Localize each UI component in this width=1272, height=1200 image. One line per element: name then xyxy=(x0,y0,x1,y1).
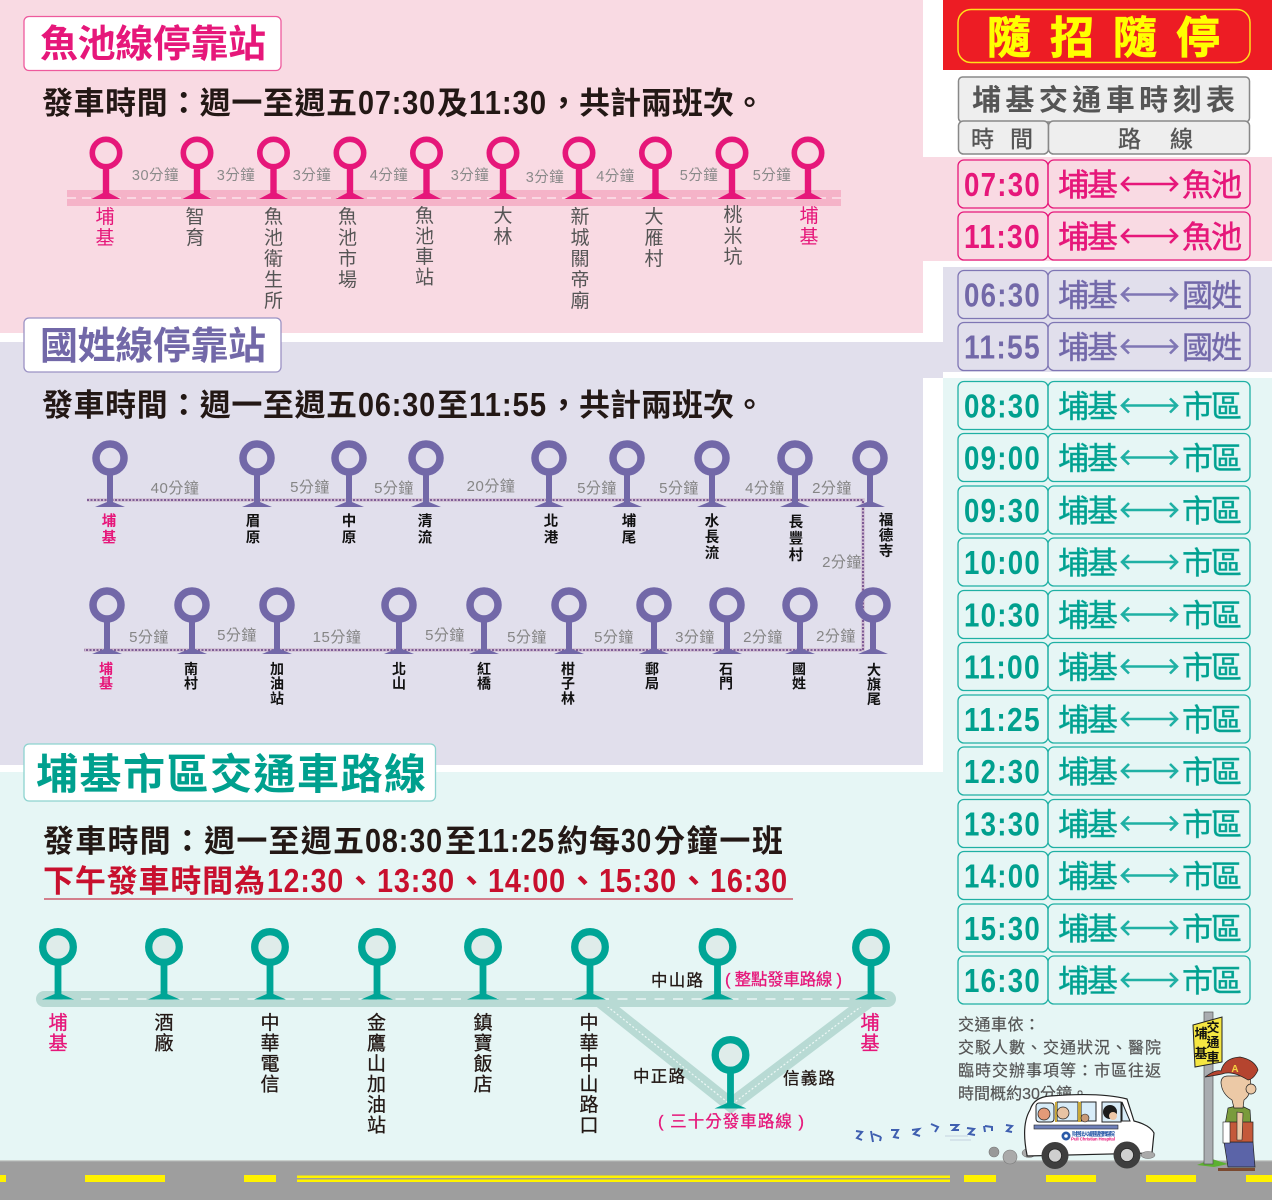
stop names: 店 xyxy=(473,1074,493,1096)
stop names: 加 xyxy=(270,661,284,677)
departure time text: 11:30 xyxy=(469,84,547,121)
departure time text: 06:30 xyxy=(358,386,436,423)
departure time text: 11:25 xyxy=(477,822,555,859)
departure time text xyxy=(42,386,765,423)
departure time text: ，共計兩班次。 xyxy=(548,86,765,121)
stop names: 新 xyxy=(570,206,590,228)
row 11:30: 埔基 xyxy=(1058,220,1118,255)
departure time text: ，共計兩班次。 xyxy=(548,388,765,423)
stop names: 廟 xyxy=(570,290,590,312)
row 07:30 xyxy=(958,160,1250,208)
heading: Yuchi line stops xyxy=(24,16,281,70)
travel times: 5分鐘 xyxy=(507,629,547,646)
road xyxy=(0,1160,1272,1200)
stop names xyxy=(48,1012,880,1136)
travel times: 2分鐘 xyxy=(822,554,862,571)
row 15:30: 市區 xyxy=(1182,912,1242,947)
stop names: 柑 xyxy=(561,661,575,677)
panel: Guoxing line xyxy=(24,318,894,707)
stop names: 埔 xyxy=(48,1012,68,1034)
travel times: 4分鐘 xyxy=(745,480,785,497)
table header: 路線 xyxy=(1118,126,1193,152)
row 11:00: 11:00 xyxy=(964,648,1041,686)
stop names: 埔 xyxy=(622,512,637,530)
road labels: ( 三十分發車路線 ) xyxy=(658,1112,804,1131)
stop names: 魚 xyxy=(415,205,434,227)
stop names: 村 xyxy=(789,547,804,564)
stop names: 華 xyxy=(260,1032,280,1054)
panel: Yuchi line xyxy=(24,16,841,312)
travel times: 5分鐘 xyxy=(577,480,617,497)
stop names: 路 xyxy=(579,1094,599,1116)
departure time text: 至 xyxy=(445,824,476,859)
stop names: 國 xyxy=(792,661,806,677)
stop names: 基 xyxy=(860,1032,880,1054)
icon: waiting man xyxy=(1205,1057,1258,1171)
row 11:25 xyxy=(958,695,1250,743)
stop names: 魚 xyxy=(338,206,357,228)
afternoon departure text: 12:30 xyxy=(267,862,344,899)
row 06:30: 埔基 xyxy=(1058,278,1118,314)
afternoon departure text: 、 xyxy=(456,864,487,899)
stop names: 車 xyxy=(415,246,434,268)
road labels xyxy=(633,970,842,1131)
row 16:30: 埔基 xyxy=(1058,964,1118,999)
stop names xyxy=(99,512,894,707)
stop pins row 2 xyxy=(92,591,888,654)
departure time text: 08:30 xyxy=(365,822,443,859)
departure time text: 發車時間：週一至週五 xyxy=(42,388,357,423)
row 06:30 xyxy=(958,270,1250,318)
background: teal section xyxy=(0,378,1272,1161)
row 08:30 xyxy=(958,382,1250,430)
travel times: 5分鐘 xyxy=(659,480,699,497)
heading: Guoxing line stops xyxy=(24,318,281,372)
row 11:30: 魚池 xyxy=(1182,220,1242,255)
travel times: 3分鐘 xyxy=(217,167,255,184)
stop names: 埔 xyxy=(102,512,117,530)
row 16:30: 市區 xyxy=(1182,964,1242,999)
icon: waiting man: A xyxy=(1231,1064,1239,1075)
afternoon departure text: 、 xyxy=(567,864,598,899)
travel times: 2分鐘 xyxy=(812,480,852,497)
stop names: 所 xyxy=(264,290,283,312)
departure time text: 及 xyxy=(437,86,468,121)
stop names: 山 xyxy=(367,1053,386,1075)
icon: bus stop sign: 埔 xyxy=(1194,1026,1208,1041)
route band xyxy=(67,190,841,206)
stop names: 坑 xyxy=(723,246,743,268)
row 11:25: 11:25 xyxy=(964,701,1041,738)
note: service conditions: 交通車依： xyxy=(958,1016,1040,1034)
stop names: 原 xyxy=(246,530,260,546)
afternoon departure text: 13:30 xyxy=(377,862,455,899)
stop names: 油 xyxy=(270,676,284,692)
afternoon departure text: 16:30 xyxy=(710,862,788,899)
stop names: 林 xyxy=(493,226,513,248)
row 10:30: 埔基 xyxy=(1058,598,1118,634)
row 09:30: 09:30 xyxy=(964,492,1041,529)
stop names: 育 xyxy=(185,227,205,249)
row 09:00 xyxy=(958,434,1250,482)
stop names: 山 xyxy=(392,676,406,692)
stop names: 信 xyxy=(260,1074,280,1096)
route line xyxy=(84,500,863,650)
row 11:00: 市區 xyxy=(1182,650,1242,686)
afternoon departure text: 15:30 xyxy=(599,862,677,899)
travel times: 2分鐘 xyxy=(743,629,783,646)
stop names: 眉 xyxy=(246,514,260,530)
row 15:30: 15:30 xyxy=(964,910,1041,947)
stop names: 姓 xyxy=(792,676,806,692)
travel times: 5分鐘 xyxy=(594,629,634,646)
stop pins xyxy=(92,139,822,199)
row 11:25: 市區 xyxy=(1182,703,1242,738)
road labels: 信義路 xyxy=(783,1069,836,1088)
stop names: 橋 xyxy=(477,676,491,692)
stop names: 廠 xyxy=(154,1032,174,1054)
icon: music notes behind the bus xyxy=(856,1124,1012,1142)
stop names: 長 xyxy=(705,529,720,546)
departure time text: 至 xyxy=(437,388,468,423)
stop names: 原 xyxy=(342,530,356,546)
row 16:30 xyxy=(958,956,1250,1004)
stop names: 站 xyxy=(415,266,434,288)
stop names: 基 xyxy=(95,227,115,249)
icon: bus stop sign: 基 xyxy=(1194,1046,1208,1061)
row 11:00: 埔基 xyxy=(1058,650,1118,686)
stop names: 魚 xyxy=(264,206,283,228)
icon: bus stop sign: 通 xyxy=(1206,1035,1220,1050)
banner: flag stop: 隨招隨停 xyxy=(987,14,1220,63)
stop names: 市 xyxy=(338,248,357,270)
stop names: 站 xyxy=(270,690,284,706)
table header: 時間 xyxy=(971,126,1033,152)
stop names: 電 xyxy=(260,1054,280,1075)
stop names: 福 xyxy=(879,512,893,529)
stop names: 港 xyxy=(544,530,559,546)
note: service conditions: 交駁人數、交通狀況、醫院 xyxy=(958,1039,1161,1057)
travel times: 5分鐘 xyxy=(374,480,414,497)
stop names: 長 xyxy=(789,514,804,531)
row 09:30: 埔基 xyxy=(1058,494,1118,529)
stop names: 基 xyxy=(799,226,819,248)
stop names: 南 xyxy=(184,661,198,677)
row 13:30: 埔基 xyxy=(1058,808,1118,842)
stop names: 大 xyxy=(867,662,881,678)
stop names: 大 xyxy=(644,206,664,228)
heading: Puji city shuttle route: 埔基市區交通車路線 xyxy=(36,751,426,798)
icon: bus stop sign: 車 xyxy=(1206,1050,1220,1065)
stop names: 村 xyxy=(644,248,664,270)
stop names: 門 xyxy=(719,676,733,692)
row 14:00: 埔基 xyxy=(1058,860,1118,894)
stop names: 寺 xyxy=(879,543,893,560)
stop names: 鷹 xyxy=(367,1032,386,1054)
background: pink section xyxy=(0,0,1272,333)
departure time text: 發車時間：週一至週五 xyxy=(42,86,357,121)
departure time text: 分鐘一班 xyxy=(654,824,783,859)
table header xyxy=(958,77,1250,154)
row 10:30: 市區 xyxy=(1182,598,1242,634)
stop names: 埔 xyxy=(799,205,819,227)
row 08:30: 市區 xyxy=(1182,390,1242,424)
afternoon departure text: 、 xyxy=(678,864,709,899)
icon: bus stop sign: 交 xyxy=(1206,1020,1220,1035)
stop names: 村 xyxy=(184,676,198,692)
road labels: 中正路 xyxy=(633,1067,686,1086)
stop names: 城 xyxy=(570,227,590,249)
row 07:30: 魚池 xyxy=(1182,168,1242,203)
row 11:55 xyxy=(958,322,1250,370)
stop names: 德 xyxy=(879,526,894,544)
row 09:30 xyxy=(958,486,1250,534)
row 11:55: 11:55 xyxy=(964,328,1041,366)
row 06:30: 06:30 xyxy=(964,276,1041,314)
departure time text: 發車時間：週一至週五 xyxy=(43,824,364,859)
travel times: 15分鐘 xyxy=(313,629,361,646)
stop names: 局 xyxy=(645,676,659,692)
stop names: 生 xyxy=(264,269,283,291)
stop names: 流 xyxy=(705,544,720,562)
stop names: 智 xyxy=(185,206,205,228)
row 13:30 xyxy=(958,800,1250,848)
panel: city line xyxy=(24,744,896,1136)
row 10:00: 埔基 xyxy=(1058,546,1118,581)
row 09:30: 市區 xyxy=(1182,494,1242,529)
stop names: 基 xyxy=(102,528,117,546)
afternoon departure text xyxy=(43,862,793,899)
departure time text: 07:30 xyxy=(358,84,436,121)
stop names: 北 xyxy=(544,513,558,530)
row 10:00: 10:00 xyxy=(964,544,1041,581)
row 12:30 xyxy=(958,747,1250,795)
stop names: 郵 xyxy=(645,661,659,677)
stop pins row 1 xyxy=(95,444,885,507)
travel times: 3分鐘 xyxy=(451,167,489,184)
row 14:00: 市區 xyxy=(1182,860,1242,894)
row 11:30: 11:30 xyxy=(964,218,1041,255)
stop names: 豐 xyxy=(789,530,803,548)
stop names: 加 xyxy=(367,1074,386,1096)
stop names: 流 xyxy=(418,528,433,546)
schedule: Yuchi rows xyxy=(958,160,1250,260)
note: service conditions xyxy=(958,1016,1161,1103)
travel times: 5分鐘 xyxy=(217,627,257,644)
row 11:55: 埔基 xyxy=(1058,330,1118,366)
row 11:55: 國姓 xyxy=(1182,330,1242,366)
stop names: 林 xyxy=(561,690,575,706)
travel times xyxy=(132,167,791,186)
row 15:30 xyxy=(958,904,1250,952)
stop names: 寶 xyxy=(473,1032,493,1054)
stop names: 關 xyxy=(570,249,590,270)
schedule: Guoxing rows xyxy=(958,270,1250,370)
stop names: 基 xyxy=(99,676,113,692)
stop names: 埔 xyxy=(860,1012,880,1034)
row 10:30 xyxy=(958,590,1250,638)
row 13:30: 市區 xyxy=(1182,808,1242,842)
travel times: 5分鐘 xyxy=(425,627,465,644)
row 07:30: 07:30 xyxy=(964,166,1041,203)
stop names: 油 xyxy=(367,1094,386,1116)
stop names: 紅 xyxy=(477,661,491,677)
icon: shuttle bus xyxy=(989,1095,1155,1169)
road labels: 中山路 xyxy=(651,971,704,990)
banner: flag stop xyxy=(943,0,1272,70)
travel times: 4分鐘 xyxy=(596,168,635,185)
afternoon departure text: 、 xyxy=(345,864,376,899)
stop names: 中 xyxy=(260,1012,280,1034)
row 14:00 xyxy=(958,852,1250,900)
note: service conditions: 臨時交辦事項等：市區往返 xyxy=(958,1061,1161,1080)
stop names: 金 xyxy=(367,1012,386,1034)
road labels: ( 整點發車路線 ) xyxy=(725,970,842,989)
stop names: 桃 xyxy=(723,204,743,226)
travel times: 5分鐘 xyxy=(129,629,169,646)
stop names: 中 xyxy=(579,1012,599,1034)
stop names: 酒 xyxy=(154,1012,174,1034)
row 15:30: 埔基 xyxy=(1058,912,1118,947)
row 09:00: 09:00 xyxy=(964,440,1041,476)
background: purple section xyxy=(0,267,1272,765)
stop names: 場 xyxy=(338,269,357,291)
row 13:30: 13:30 xyxy=(964,806,1041,842)
stop names: 埔 xyxy=(99,661,113,677)
stop pins xyxy=(42,932,887,1108)
row 12:30: 12:30 xyxy=(964,753,1041,790)
row 12:30: 市區 xyxy=(1182,755,1242,790)
stop names: 尾 xyxy=(867,691,881,707)
row 08:30: 埔基 xyxy=(1058,390,1118,424)
travel times: 3分鐘 xyxy=(675,629,715,646)
row 09:00: 埔基 xyxy=(1058,442,1118,476)
stop names: 池 xyxy=(415,226,434,248)
table header: 埔基交通車時刻表 xyxy=(972,84,1235,117)
stop names: 站 xyxy=(367,1114,386,1136)
afternoon departure text: 14:00 xyxy=(488,862,566,899)
stop names: 旗 xyxy=(867,676,881,692)
heading: Yuchi line stops: 魚池線停靠站 xyxy=(40,24,266,66)
stop names: 山 xyxy=(579,1074,599,1096)
icon: bus stop sign xyxy=(1193,1012,1228,1167)
travel times: 4分鐘 xyxy=(370,167,408,184)
stop names: 清 xyxy=(418,513,433,530)
stop names: 埔 xyxy=(95,206,115,228)
stop names: 子 xyxy=(561,676,575,692)
stop names: 衛 xyxy=(264,248,283,270)
travel times: 40分鐘 xyxy=(151,480,199,497)
travel times xyxy=(129,478,862,646)
row 11:00 xyxy=(958,642,1250,690)
stop names: 尾 xyxy=(622,530,636,546)
departure time text: 約每 xyxy=(557,824,620,859)
stop names: 大 xyxy=(493,205,513,227)
icon: shuttle bus: Puli Christian Hospital xyxy=(1071,1136,1115,1142)
stop names: 帝 xyxy=(570,269,590,291)
row 12:30: 埔基 xyxy=(1058,755,1118,790)
departure time text xyxy=(42,84,765,121)
departure time text xyxy=(43,822,783,859)
row 09:00: 市區 xyxy=(1182,442,1242,476)
afternoon departure text: 下午發車時間為 xyxy=(43,864,265,899)
travel times: 3分鐘 xyxy=(526,169,564,186)
travel times: 30分鐘 xyxy=(132,167,179,184)
icon: shuttle bus: 財團法人埔里基督教醫院 xyxy=(1072,1130,1115,1138)
row 10:30: 10:30 xyxy=(964,596,1041,634)
row 11:25: 埔基 xyxy=(1058,703,1118,738)
stop names: 池 xyxy=(338,227,357,249)
stop names: 池 xyxy=(264,227,283,249)
stop names: 中 xyxy=(579,1053,599,1075)
departure time text: 30 xyxy=(621,822,652,859)
travel times: 5分鐘 xyxy=(680,167,718,184)
row 10:00: 市區 xyxy=(1182,546,1242,581)
stop names: 鎮 xyxy=(473,1012,493,1034)
stop names: 基 xyxy=(48,1032,68,1054)
heading: Guoxing line stops: 國姓線停靠站 xyxy=(40,326,266,368)
stop names: 米 xyxy=(723,225,743,247)
row 10:00 xyxy=(958,538,1250,586)
stop names: 北 xyxy=(392,661,406,677)
row 14:00: 14:00 xyxy=(964,858,1041,894)
route band with branch xyxy=(36,991,896,1105)
travel times: 5分鐘 xyxy=(753,167,791,184)
row 08:30: 08:30 xyxy=(964,388,1041,424)
stop names: 雁 xyxy=(644,228,664,249)
row 16:30: 16:30 xyxy=(964,962,1041,999)
stop names: 飯 xyxy=(473,1053,493,1075)
row 06:30: 國姓 xyxy=(1182,278,1242,314)
stop names: 口 xyxy=(579,1116,599,1136)
travel times: 3分鐘 xyxy=(293,167,331,184)
travel times: 2分鐘 xyxy=(816,628,856,645)
schedule: city rows xyxy=(958,382,1250,1004)
travel times: 5分鐘 xyxy=(290,479,330,496)
travel times: 20分鐘 xyxy=(467,478,515,495)
row 11:30 xyxy=(958,212,1250,260)
row 07:30: 埔基 xyxy=(1058,168,1118,203)
stop names: 華 xyxy=(579,1032,599,1054)
departure time text: 11:55 xyxy=(469,386,547,423)
note: service conditions: 時間概約30分鐘。 xyxy=(958,1085,1088,1103)
stop names xyxy=(95,204,819,312)
stop names: 水 xyxy=(705,513,720,530)
stop names: 中 xyxy=(342,513,356,530)
stop names: 石 xyxy=(719,661,733,677)
